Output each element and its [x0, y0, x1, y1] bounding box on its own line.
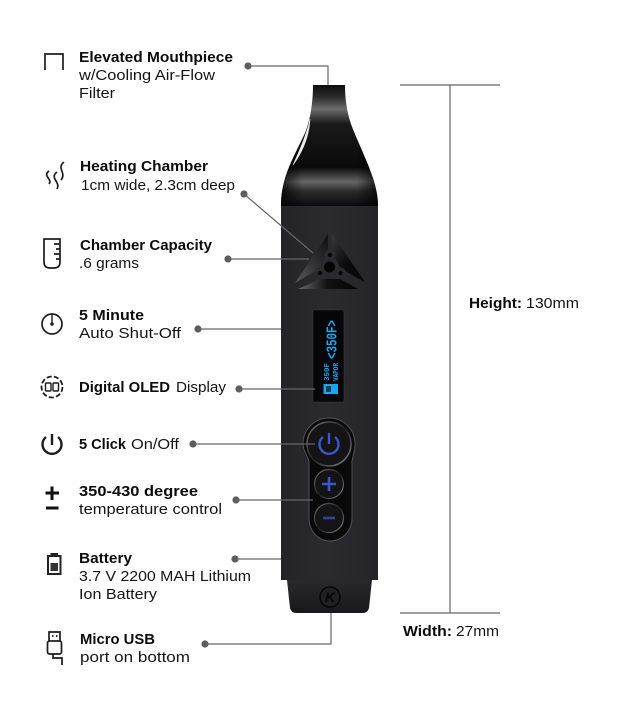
label: width: 27mm — [456, 624, 499, 640]
device: vaporizer — [281, 85, 378, 613]
label: height — [469, 296, 579, 312]
text: temperature control: 350-430 degree — [79, 484, 198, 500]
logo: K badge: K — [325, 589, 336, 605]
icon: plus minus — [46, 486, 59, 508]
connector: OLED display — [235, 385, 315, 393]
connector: chamber capacity — [224, 255, 309, 263]
connector: micro USB — [201, 613, 331, 648]
text: on/off: On/Off — [131, 437, 180, 453]
text: micro USB — [80, 632, 190, 666]
text: on/off — [79, 437, 180, 453]
OLED display: VAPOR — [333, 363, 341, 381]
text: elevated mouthpiece: Elevated Mouthpiece — [79, 50, 233, 66]
icon: battery — [48, 553, 60, 574]
logo: K badge — [320, 587, 340, 607]
text: elevated mouthpiece: w/Cooling Air-Flow — [78, 68, 216, 84]
connector: battery — [231, 555, 281, 563]
text: micro USB: port on bottom — [80, 650, 190, 666]
label: width — [403, 624, 499, 640]
text: micro USB: Micro USB — [80, 632, 155, 648]
icon: usb cable — [48, 632, 62, 665]
connector: heating chamber — [240, 190, 313, 253]
connector: on/off — [189, 440, 315, 448]
text: elevated mouthpiece: Filter — [79, 86, 115, 102]
dimension bracket — [400, 85, 500, 613]
icon: digital display — [42, 376, 62, 398]
text: temperature control — [79, 484, 222, 518]
text: battery: Ion Battery — [79, 587, 158, 603]
icon: heat waves — [47, 162, 64, 189]
plus button — [314, 470, 344, 498]
mouthpiece — [281, 85, 378, 206]
text: on/off: 5 Click — [79, 437, 127, 453]
icon: power — [42, 434, 61, 454]
text: auto shut-off — [79, 308, 182, 342]
text: auto shut-off: Auto Shut-Off — [79, 326, 182, 342]
text: heating chamber — [80, 159, 235, 194]
icon: mouthpiece — [45, 54, 63, 70]
icon: timer — [42, 314, 62, 334]
text: heating chamber: 1cm wide, 2.3cm deep — [81, 178, 235, 194]
OLED display — [313, 310, 344, 402]
device base — [287, 580, 372, 613]
minus button — [314, 504, 344, 532]
connector: temperature control — [232, 496, 313, 504]
power button — [307, 422, 351, 466]
text: digital OLED display: Digital OLED — [79, 380, 170, 396]
text: heating chamber: Heating Chamber — [80, 159, 208, 175]
label: height: 130mm — [526, 296, 579, 312]
text: digital OLED display — [79, 380, 227, 396]
text: battery — [79, 551, 251, 603]
text: battery: 3.7 V 2200 MAH Lithium — [79, 569, 251, 585]
icon: beaker — [44, 239, 60, 268]
device body — [281, 206, 378, 580]
control buttons — [303, 418, 355, 541]
label: height: Height: — [469, 296, 522, 312]
connector: auto shut-off — [194, 325, 281, 333]
connector: mouthpiece — [244, 62, 328, 85]
text: chamber capacity: Chamber Capacity — [80, 238, 212, 254]
OLED display: <350F> — [324, 320, 342, 359]
text: chamber capacity — [79, 238, 212, 272]
text: auto shut-off: 5 Minute — [79, 308, 144, 324]
text: chamber capacity: .6 grams — [79, 256, 139, 272]
text: digital OLED display: Display — [176, 380, 227, 396]
text: elevated mouthpiece — [78, 50, 233, 102]
text: temperature control: temperature control — [79, 502, 222, 518]
OLED display: 350F — [324, 363, 332, 381]
text: battery: Battery — [79, 551, 132, 567]
logo: triangle — [295, 234, 365, 289]
label: width: Width: — [403, 624, 452, 640]
